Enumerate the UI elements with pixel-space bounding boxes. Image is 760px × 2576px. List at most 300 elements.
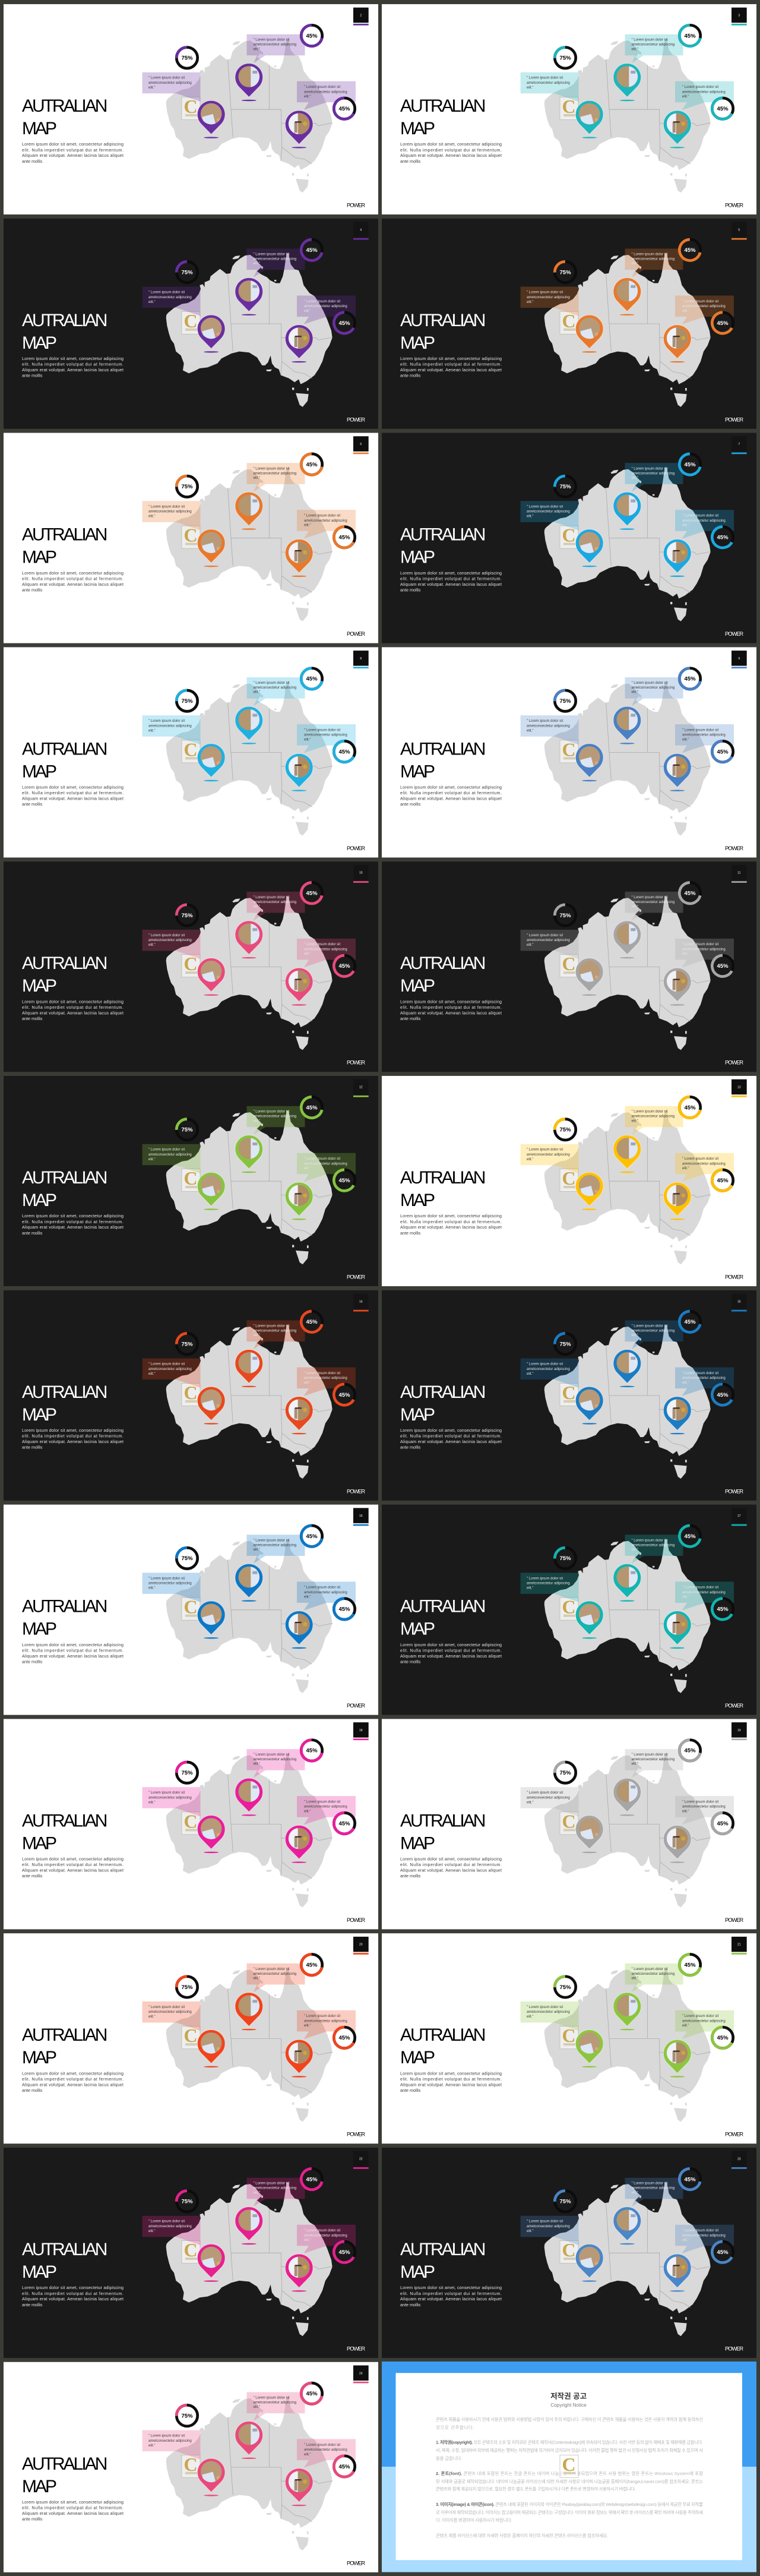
donut 75% (555, 1119, 576, 1140)
callout west: " Lorem ipsum dolor sit (527, 1791, 563, 1795)
callout north: ametconsectetur adipiscing (632, 257, 674, 261)
body text: Lorem ipsum dolor sit amet, consectetur adipiscing (22, 785, 124, 790)
callout north: ametconsectetur adipiscing (253, 2401, 296, 2405)
callout west: " Lorem ipsum dolor sit (527, 719, 563, 723)
body text: Aliquam erat volutpat. Aenean lacinia lacus aliquet (22, 2082, 124, 2087)
donut 75% (555, 1762, 576, 1783)
callout north: ametconsectetur adipiscing (632, 1543, 674, 1547)
callout west: " Lorem ipsum dolor sit (527, 1148, 563, 1152)
body text (22, 999, 124, 1021)
section image: 로 이루어져 제작되었습니다. 이미지는 참고용이며 제공되는 콘텐츠는 구성입니다. 이미지 원본 정보는 위에서 확인 후 라이선스를 확인 바라며 사용을 주의하세 (436, 2509, 703, 2515)
pin east (285, 1825, 313, 1863)
body text (400, 1642, 502, 1664)
slide background (382, 647, 756, 857)
callout west: ametconsectetur adipiscing (148, 939, 192, 942)
callout west (142, 2216, 201, 2245)
callout west: elit." (148, 1372, 155, 1376)
donut 75%: 75% (559, 55, 571, 62)
donut 75%: 75% (181, 2413, 193, 2419)
callout west: ametconsectetur adipiscing (148, 2010, 192, 2014)
brand: POWER (725, 416, 743, 423)
body text (400, 999, 502, 1021)
donut 45% east: 45% (717, 106, 729, 112)
title: MAP (400, 119, 435, 138)
body text: elit. Nulla imperdiet volutpat dui at fermentum. (400, 2291, 502, 2296)
callout west: ametconsectetur adipiscing (527, 939, 570, 942)
pin west (197, 1601, 225, 1639)
donut 75%: 75% (559, 2199, 571, 2205)
pin north (235, 1993, 263, 2030)
watermark logo: C (562, 525, 576, 546)
pin north (235, 1135, 263, 1173)
title: AUTRALIAN (22, 525, 107, 545)
watermark logo: C (183, 953, 198, 974)
body text: ante mollis (400, 2088, 421, 2093)
body text: elit. Nulla imperdiet volutpat dui at fermentum. (400, 1647, 502, 1653)
donut 45% north: 45% (306, 247, 318, 254)
callout north: elit." (632, 691, 638, 694)
body text: Aliquam erat volutpat. Aenean lacinia lacus aliquet (400, 2082, 502, 2087)
watermark logo (182, 1596, 200, 1620)
callout north: " Lorem ipsum dolor sit (253, 467, 290, 471)
callout west (142, 715, 201, 744)
watermark logo: C (183, 2454, 198, 2475)
page number: 11 (737, 872, 741, 875)
callout east: elit." (682, 738, 689, 741)
watermark logo (560, 1596, 578, 1620)
callout west: ametconsectetur adipiscing (527, 2225, 570, 2228)
donut 75%: 75% (181, 1341, 193, 1347)
donut 45% north (677, 1523, 703, 1549)
title: MAP (400, 1620, 435, 1639)
callout west (142, 1787, 201, 1816)
page number: 19 (737, 1729, 741, 1732)
callout north: ametconsectetur adipiscing (632, 2187, 674, 2190)
page number: 4 (360, 228, 362, 232)
body text (22, 570, 124, 592)
callout east: " Lorem ipsum dolor sit (682, 86, 718, 89)
callout east: elit." (682, 952, 689, 956)
map of Australia (166, 1110, 332, 1264)
pin east (285, 753, 313, 791)
page number (353, 2366, 369, 2384)
callout east (675, 510, 734, 539)
brand: POWER (347, 1703, 365, 1709)
section image (436, 2502, 703, 2523)
callout north: elit." (253, 1548, 260, 1552)
body text: ante mollis (22, 1230, 43, 1236)
brand: POWER (725, 202, 743, 209)
donut 45% north: 45% (684, 1533, 696, 1540)
title: MAP (400, 2048, 435, 2067)
watermark logo: C (183, 2025, 198, 2046)
pin north (613, 1564, 641, 1602)
callout east (675, 2010, 734, 2039)
body text (400, 141, 502, 164)
donut 45% north: 45% (684, 462, 696, 468)
title: MAP (22, 548, 56, 567)
pin west (197, 958, 225, 996)
pin west (197, 315, 225, 353)
body text: elit. Nulla imperdiet volutpat dui at fermentum. (400, 1434, 502, 1439)
map of Australia (166, 1324, 332, 1479)
body text (400, 570, 502, 592)
callout east: ametconsectetur adipiscing (682, 2019, 726, 2023)
donut 45% east (330, 1166, 359, 1195)
callout north: " Lorem ipsum dolor sit (632, 252, 668, 256)
donut 75%: 75% (559, 1770, 571, 1776)
brand: POWER (347, 2560, 365, 2566)
callout north: ametconsectetur adipiscing (253, 1115, 296, 1119)
pin east (663, 1397, 691, 1434)
callout east: ametconsectetur adipiscing (304, 90, 347, 94)
callout west: ametconsectetur adipiscing (527, 510, 570, 514)
callout north: elit." (632, 905, 638, 908)
callout north: " Lorem ipsum dolor sit (253, 1968, 290, 1971)
callout west: elit." (148, 1801, 155, 1804)
donut 45% east: 45% (338, 1392, 350, 1399)
body text: Lorem ipsum dolor sit amet, consectetur adipiscing (22, 2285, 124, 2290)
callout north: " Lorem ipsum dolor sit (632, 1325, 668, 1328)
body text: Lorem ipsum dolor sit amet, consectetur adipiscing (400, 1428, 502, 1433)
section image: 다. 이미지를 변경하여 사용하시기 바랍니다. (436, 2518, 512, 2523)
brand: POWER (725, 631, 743, 637)
brand: POWER (347, 416, 365, 423)
brand: POWER (347, 1274, 365, 1281)
slide background (382, 433, 756, 643)
donut 45% north (299, 1523, 325, 1549)
callout west: ametconsectetur adipiscing (527, 1153, 570, 1157)
donut 45% east: 45% (338, 1177, 350, 1184)
callout east: elit." (304, 95, 311, 99)
donut 45% east: 45% (338, 1606, 350, 1613)
callout east: elit." (682, 2239, 689, 2242)
title: MAP (22, 1191, 56, 1210)
map of Australia (166, 2182, 332, 2336)
body text (400, 356, 502, 378)
callout east: " Lorem ipsum dolor sit (304, 514, 340, 518)
callout north (625, 463, 683, 492)
pin west (575, 1601, 603, 1639)
callout east (297, 1368, 356, 1396)
callout east (297, 510, 356, 539)
page number: 7 (738, 443, 740, 446)
callout north (247, 2392, 305, 2421)
donut 45% east (330, 952, 359, 980)
callout north (247, 248, 305, 277)
pin east (663, 2254, 691, 2292)
callout east: ametconsectetur adipiscing (682, 1377, 726, 1380)
title: MAP (22, 119, 56, 138)
body text: ante mollis (22, 1016, 43, 1021)
callout north: " Lorem ipsum dolor sit (253, 1539, 290, 1542)
callout east: ametconsectetur adipiscing (304, 1162, 347, 1166)
callout west: ametconsectetur adipiscing (148, 1368, 192, 1371)
map of Australia (544, 2182, 711, 2336)
callout east: ametconsectetur adipiscing (304, 2234, 347, 2237)
map of Australia (166, 2396, 332, 2550)
pin east (285, 539, 313, 577)
pin east (663, 1825, 691, 1863)
callout north: elit." (253, 2405, 260, 2409)
pin east (285, 968, 313, 1006)
donut 75%: 75% (181, 1127, 193, 1134)
title: MAP (400, 762, 435, 781)
title: AUTRALIAN (22, 2454, 107, 2474)
callout east: elit." (304, 2024, 311, 2028)
pin east (285, 1397, 313, 1434)
donut 45% east (330, 1595, 359, 1623)
title: MAP (22, 1405, 56, 1425)
slide background (4, 2362, 378, 2572)
callout north: " Lorem ipsum dolor sit (632, 681, 668, 685)
body text (22, 1642, 124, 1664)
brand: POWER (725, 1274, 743, 1281)
title: MAP (22, 1833, 56, 1853)
title: MAP (400, 1191, 435, 1210)
donut 45% north: 45% (684, 676, 696, 683)
page number: 17 (737, 1514, 741, 1518)
watermark logo: C (183, 738, 198, 760)
donut 45% north: 45% (684, 1104, 696, 1111)
callout north: " Lorem ipsum dolor sit (632, 39, 668, 42)
donut 45% east: 45% (717, 320, 729, 327)
watermark logo (560, 2239, 578, 2264)
donut 45% east: 45% (338, 535, 350, 541)
map of Australia (544, 1110, 711, 1264)
pin north (235, 2422, 263, 2459)
body text: ante mollis (400, 373, 421, 378)
pin east (663, 968, 691, 1006)
donut 45% east (708, 2023, 737, 2052)
slide 16 blue light (4, 1505, 378, 1715)
body text: Aliquam erat volutpat. Aenean lacinia lacus aliquet (400, 1868, 502, 1873)
slide 15 blue dark (382, 1290, 756, 1501)
slide background (382, 219, 756, 429)
page number: 3 (738, 14, 740, 18)
watermark logo: C (562, 2454, 576, 2475)
callout west (521, 930, 578, 959)
map of Australia (544, 252, 711, 407)
watermark logo: C (562, 1596, 576, 1618)
callout north: elit." (632, 1334, 638, 1337)
callout west: elit." (527, 1587, 533, 1590)
title: AUTRALIAN (22, 96, 107, 116)
callout north: elit." (632, 262, 638, 266)
slide 24 pink light (4, 2362, 378, 2572)
callout east: " Lorem ipsum dolor sit (304, 1800, 340, 1804)
callout north: ametconsectetur adipiscing (632, 1330, 674, 1333)
title: MAP (22, 2262, 56, 2282)
title: AUTRALIAN (400, 1811, 485, 1830)
page number (353, 1508, 369, 1526)
donut 45% north: 45% (306, 1962, 318, 1968)
slide background (4, 861, 378, 1072)
donut 75% (176, 1762, 198, 1783)
callout north: " Lorem ipsum dolor sit (632, 1539, 668, 1542)
callout north: " Lorem ipsum dolor sit (253, 1753, 290, 1757)
donut 45% east: 45% (338, 963, 350, 970)
donut 45% east (330, 1380, 359, 1409)
page number (732, 1294, 747, 1312)
donut 75% (176, 2405, 198, 2426)
pin west (197, 1816, 225, 1853)
slide 12 green dark (4, 1076, 378, 1286)
body text: Lorem ipsum dolor sit amet, consectetur adipiscing (22, 999, 124, 1004)
watermark logo (560, 1167, 578, 1192)
donut 45% east: 45% (338, 320, 350, 327)
title: MAP (400, 1405, 435, 1425)
page number: 22 (359, 2158, 363, 2161)
callout east (675, 1796, 734, 1824)
callout north: elit." (632, 476, 638, 480)
donut 45% north: 45% (306, 890, 318, 896)
callout west: elit." (527, 2015, 533, 2019)
callout east (675, 1153, 734, 1182)
body text: elit. Nulla imperdiet volutpat dui at fermentum. (400, 1219, 502, 1224)
body text: elit. Nulla imperdiet volutpat dui at fermentum. (400, 576, 502, 581)
body text: Aliquam erat volutpat. Aenean lacinia lacus aliquet (22, 1439, 124, 1444)
page number: 23 (737, 2158, 741, 2161)
slide background (4, 1719, 378, 1929)
callout west: ametconsectetur adipiscing (148, 724, 192, 728)
callout west: " Lorem ipsum dolor sit (148, 77, 185, 80)
body text: Lorem ipsum dolor sit amet, consectetur adipiscing (400, 1213, 502, 1218)
pin east (285, 325, 313, 362)
donut 45% north (677, 237, 703, 263)
title: MAP (400, 2262, 435, 2282)
donut 75% (555, 476, 576, 497)
callout west: ametconsectetur adipiscing (148, 510, 192, 514)
brand: POWER (725, 1060, 743, 1066)
brand: POWER (347, 1060, 365, 1066)
body text: Aliquam erat volutpat. Aenean lacinia lacus aliquet (22, 1868, 124, 1873)
callout north: " Lorem ipsum dolor sit (253, 39, 290, 42)
donut 45% north: 45% (684, 1962, 696, 1968)
body text: ante mollis (22, 159, 43, 164)
body text: ante mollis (400, 801, 421, 807)
callout west: ametconsectetur adipiscing (527, 2010, 570, 2014)
callout west (521, 72, 578, 102)
body text: Lorem ipsum dolor sit amet, consectetur adipiscing (400, 356, 502, 361)
watermark logo: C (562, 953, 576, 974)
donut 45% north (299, 1094, 325, 1120)
pin east (663, 2040, 691, 2078)
callout north: " Lorem ipsum dolor sit (632, 467, 668, 471)
brand: POWER (347, 2132, 365, 2138)
slide background (4, 1933, 378, 2143)
donut 45% east (708, 523, 737, 551)
slide 2 purple light (4, 4, 378, 214)
body text: elit. Nulla imperdiet volutpat dui at fermentum. (22, 1862, 124, 1867)
title: MAP (400, 548, 435, 567)
pin east (285, 2040, 313, 2078)
map of Australia (544, 1324, 711, 1479)
callout east: " Lorem ipsum dolor sit (682, 2229, 718, 2233)
callout east: elit." (304, 2453, 311, 2457)
body text: Lorem ipsum dolor sit amet, consectetur adipiscing (400, 1642, 502, 1647)
body text: Lorem ipsum dolor sit amet, consectetur adipiscing (22, 570, 124, 576)
body text: Lorem ipsum dolor sit amet, consectetur adipiscing (400, 2285, 502, 2290)
callout west: " Lorem ipsum dolor sit (527, 2006, 563, 2009)
callout east: ametconsectetur adipiscing (682, 2234, 726, 2237)
title: AUTRALIAN (22, 1382, 107, 1402)
watermark logo (182, 1382, 200, 1406)
map of Australia (166, 1753, 332, 1908)
body text: ante mollis (22, 373, 43, 378)
donut 45% north (299, 880, 325, 906)
title: AUTRALIAN (22, 1168, 107, 1188)
map of Australia (166, 38, 332, 192)
slide 18 magenta light (4, 1719, 378, 1929)
callout north: " Lorem ipsum dolor sit (632, 1110, 668, 1114)
pin north (613, 1135, 641, 1173)
callout west: " Lorem ipsum dolor sit (527, 934, 563, 937)
watermark logo: C (562, 1382, 576, 1403)
callout west: " Lorem ipsum dolor sit (148, 2006, 185, 2009)
donut 45% north (677, 1309, 703, 1334)
section font: 된 서체와 글꼴로 제작되었습니다. 네이버 나눔글꼴 라이선스에 대한 자세한 사항은 네이버 나눔글꼴 홈페이지(hangeul.naver.com)를 참조하세요. 폰트는 (436, 2479, 703, 2484)
slide background (4, 433, 378, 643)
callout east: ametconsectetur adipiscing (304, 1377, 347, 1380)
callout east: elit." (304, 738, 311, 741)
slide 3 teal light (382, 4, 756, 214)
page number: 21 (737, 1943, 741, 1947)
callout east: ametconsectetur adipiscing (304, 1805, 347, 1809)
callout west: " Lorem ipsum dolor sit (148, 719, 185, 723)
slide background (382, 1933, 756, 2143)
donut 45% north (299, 1738, 325, 1763)
body text: Aliquam erat volutpat. Aenean lacinia lacus aliquet (400, 1439, 502, 1444)
body text (400, 2285, 502, 2307)
pin north (235, 2207, 263, 2244)
pin north (613, 921, 641, 958)
donut 75%: 75% (559, 1341, 571, 1347)
callout east (297, 2010, 356, 2039)
callout north: " Lorem ipsum dolor sit (632, 896, 668, 899)
callout west: elit." (527, 515, 533, 519)
callout east (297, 1153, 356, 1182)
donut 45% north (677, 666, 703, 692)
slide background (4, 2148, 378, 2358)
callout north: " Lorem ipsum dolor sit (253, 252, 290, 256)
slide background (382, 1505, 756, 1715)
donut 45% north (677, 880, 703, 906)
callout west: ametconsectetur adipiscing (148, 2225, 192, 2228)
callout north: ametconsectetur adipiscing (253, 1330, 296, 1333)
callout east (297, 296, 356, 324)
title: MAP (400, 976, 435, 996)
callout east (297, 724, 356, 753)
page number: 15 (737, 1300, 741, 1303)
callout east (675, 1368, 734, 1396)
callout east: " Lorem ipsum dolor sit (682, 1800, 718, 1804)
donut 45% north: 45% (306, 1533, 318, 1540)
slide background (382, 1076, 756, 1286)
pin east (285, 1182, 313, 1220)
donut 45% east: 45% (338, 106, 350, 112)
callout north (625, 1749, 683, 1778)
callout east: elit." (682, 524, 689, 528)
slide 13 yellow light (382, 1076, 756, 1286)
callout east: ametconsectetur adipiscing (304, 2019, 347, 2023)
callout east: ametconsectetur adipiscing (304, 519, 347, 523)
donut 45% north: 45% (306, 1748, 318, 1754)
callout east: ametconsectetur adipiscing (682, 1162, 726, 1166)
pin north (613, 64, 641, 101)
callout west: ametconsectetur adipiscing (527, 1368, 570, 1371)
callout west (142, 930, 201, 959)
